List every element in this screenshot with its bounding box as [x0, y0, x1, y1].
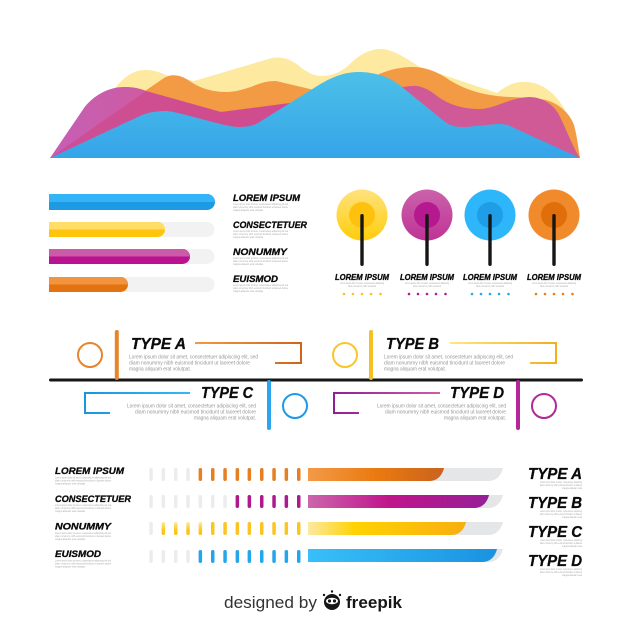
lollipop: magenta: Lorem ipsum dolor sit amet, consectetuer adipiscing	[405, 282, 450, 285]
lollipop: magenta: diam nonummy nibh euismod	[413, 285, 442, 288]
type C item: magna aliquam erat volutpat.	[194, 416, 256, 422]
row 2: consectetuer: magna aliquam erat	[562, 516, 582, 519]
bar: magenta	[49, 249, 215, 264]
area: orange layer	[50, 67, 580, 158]
label: lorem ipsum: LOREM IPSUM	[233, 193, 301, 204]
lollipop: blue: Lorem ipsum dolor sit amet, consectetuer adipiscing	[468, 282, 513, 285]
bar labels	[233, 193, 307, 293]
lollipop: yellow	[335, 190, 389, 295]
row 4: euismod: magna aliquam erat	[562, 574, 582, 577]
lollipop: blue: LOREM IPSUM	[463, 273, 517, 282]
footer credit	[224, 590, 403, 612]
progress bars panel	[49, 194, 215, 292]
lollipop: yellow: Lorem ipsum dolor sit amet, consectetuer adipiscing	[340, 282, 385, 285]
row 2: consectetuer: CONSECTETUER	[55, 494, 131, 505]
row 1: lorem ipsum: magna aliquam erat volutpat	[55, 482, 85, 486]
label: consectetuer: CONSECTETUER	[233, 220, 307, 231]
type A item: TYPE A	[131, 336, 186, 353]
label: nonummy	[233, 247, 289, 266]
area: darker pink wedge	[50, 91, 300, 158]
type A item: diam nonummy nibh euismod tincidunt ut laoreet dolore	[129, 360, 250, 366]
lollipop: orange	[527, 190, 581, 295]
row 2: consectetuer: Lorem ipsum dolor sit amet, consectetuer adipiscing	[540, 510, 583, 513]
timeline panel	[49, 330, 583, 430]
label: consectetuer: magna aliquam erat volutpat	[233, 236, 263, 239]
row 3: nonummy: diam nonummy nibh euismod tincidunt ut laoreet	[540, 542, 582, 545]
label: euismod	[233, 274, 289, 293]
row 1: lorem ipsum: LOREM IPSUM	[55, 466, 125, 477]
lollipop: blue: diam nonummy nibh euismod	[476, 285, 505, 288]
row 4: euismod: diam nonummy nibh euismod tincidunt ut laoreet	[540, 571, 582, 574]
type D item	[334, 380, 556, 430]
timeline axis	[49, 378, 583, 382]
bar: blue	[49, 194, 215, 210]
row 3: nonummy: magna aliquam erat volutpat	[55, 538, 85, 541]
row 4: euismod	[55, 549, 583, 577]
label: nonummy: NONUMMY	[233, 247, 289, 258]
label: euismod: magna aliquam erat volutpat	[233, 290, 263, 293]
row 2: consectetuer: Lorem ipsum dolor sit amet, consectetuer adipiscing elit sed	[55, 504, 112, 507]
type C item	[85, 380, 307, 430]
row 3: nonummy	[55, 522, 583, 548]
type A item	[78, 330, 301, 380]
type C item: Lorem ipsum dolor sit amet, consectetuer adipiscing elit, sed	[127, 404, 256, 410]
row 4: euismod: EUISMOD	[55, 549, 101, 560]
row 1: lorem ipsum: diam nonummy nibh euismod tincidunt ut laoreet	[540, 484, 582, 487]
label: lorem ipsum	[233, 193, 301, 212]
row 3: nonummy: TYPE C	[528, 524, 582, 541]
row 2: consectetuer: TYPE B	[528, 495, 582, 512]
area: blue layer	[50, 72, 580, 158]
label: nonummy: Lorem ipsum dolor sit amet, consectetuer adipiscing elit sed	[233, 257, 289, 260]
row 1: lorem ipsum	[55, 466, 583, 490]
row 2: consectetuer: magna aliquam erat volutpat	[55, 510, 85, 513]
row 4: euismod: TYPE D	[528, 553, 582, 570]
bottom comparison table	[55, 466, 583, 577]
label: lorem ipsum: magna aliquam erat volutpat	[233, 209, 263, 212]
label: consectetuer	[233, 220, 307, 239]
type B item: magna aliquam erat volutpat.	[384, 366, 446, 372]
row 4: euismod: Lorem ipsum dolor sit amet, consectetuer adipiscing elit sed	[55, 560, 112, 562]
type D item: TYPE D	[450, 385, 504, 402]
lollipop: orange: diam nonummy nibh euismod	[540, 285, 569, 288]
row 1: lorem ipsum: Lorem ipsum dolor sit amet, consectetuer adipiscing elit sed	[55, 476, 112, 480]
row 4: euismod: diam nonummy nibh euismod tincidunt ut laoreet dolore	[55, 562, 112, 566]
type B item: diam nonummy nibh euismod tincidunt ut laoreet dolore	[384, 360, 505, 366]
area chart: overlapping mountains	[50, 49, 580, 158]
row 1: lorem ipsum: magna aliquam erat	[562, 487, 582, 490]
type C item: diam nonummy nibh euismod tincidunt ut laoreet dolore	[135, 410, 256, 416]
type A item: magna aliquam erat volutpat.	[129, 366, 191, 372]
label: lorem ipsum: Lorem ipsum dolor sit amet, consectetuer adipiscing elit sed	[233, 203, 289, 206]
row 3: nonummy: Lorem ipsum dolor sit amet, consectetuer adipiscing elit sed	[55, 532, 112, 535]
label: euismod: EUISMOD	[233, 274, 278, 285]
lollipop: yellow: LOREM IPSUM	[335, 273, 389, 282]
bar: yellow	[49, 222, 215, 237]
row 1: lorem ipsum: diam nonummy nibh euismod tincidunt ut laoreet dolore	[55, 480, 112, 482]
freepik wordmark: freepik	[346, 593, 403, 612]
lollipop: orange: LOREM IPSUM	[527, 273, 581, 282]
label: euismod: diam nonummy nibh euismod tincidunt ut laoreet dolore	[233, 287, 289, 290]
row 3: nonummy: diam nonummy nibh euismod tincidunt ut laoreet dolore	[55, 535, 112, 538]
type D item: diam nonummy nibh euismod tincidunt ut laoreet dolore	[385, 410, 506, 416]
type C item: TYPE C	[201, 385, 253, 402]
row 1: lorem ipsum: TYPE A	[528, 466, 582, 483]
lollipop: blue	[463, 190, 517, 295]
lollipop: magenta: LOREM IPSUM	[400, 273, 454, 282]
label: lorem ipsum: diam nonummy nibh euismod tincidunt ut laoreet dolore	[233, 206, 289, 209]
row 3: nonummy: magna aliquam erat	[562, 545, 582, 548]
type D item: Lorem ipsum dolor sit amet, consectetuer adipiscing elit, sed	[377, 404, 506, 410]
row 3: nonummy: Lorem ipsum dolor sit amet, consectetuer adipiscing	[540, 539, 583, 542]
type B item	[333, 330, 556, 380]
type D item: magna aliquam erat volutpat.	[444, 416, 506, 422]
type B item: TYPE B	[386, 336, 439, 353]
label: euismod: Lorem ipsum dolor sit amet, consectetuer adipiscing elit sed	[233, 284, 289, 287]
lollipop: yellow: diam nonummy nibh euismod	[348, 285, 377, 288]
type A item: Lorem ipsum dolor sit amet, consectetuer adipiscing elit, sed	[129, 354, 258, 360]
row 3: nonummy: NONUMMY	[55, 522, 113, 532]
label: consectetuer: diam nonummy nibh euismod tincidunt ut laoreet dolore	[233, 233, 289, 236]
label: nonummy: magna aliquam erat volutpat	[233, 263, 263, 266]
row 2: consectetuer	[55, 494, 583, 519]
label: consectetuer: Lorem ipsum dolor sit amet, consectetuer adipiscing elit sed	[233, 230, 289, 233]
lollipop panel	[335, 190, 581, 295]
lollipop: magenta	[400, 190, 454, 295]
row 2: consectetuer: diam nonummy nibh euismod tincidunt ut laoreet	[540, 513, 582, 516]
area: pink layer	[50, 86, 580, 158]
row 2: consectetuer: diam nonummy nibh euismod tincidunt ut laoreet dolore	[55, 507, 112, 510]
lollipop: orange: Lorem ipsum dolor sit amet, consectetuer adipiscing	[532, 282, 577, 285]
credit text: designed by	[224, 594, 318, 612]
type B item: Lorem ipsum dolor sit amet, consectetuer adipiscing elit, sed	[384, 354, 513, 360]
row 4: euismod: Lorem ipsum dolor sit amet, consectetuer adipiscing	[540, 568, 583, 571]
row 4: euismod: magna aliquam erat volutpat	[55, 566, 85, 568]
bar: orange	[49, 277, 215, 292]
area: yellow layer	[50, 49, 580, 158]
row 1: lorem ipsum: Lorem ipsum dolor sit amet, consectetuer adipiscing	[540, 481, 583, 484]
icon: freepik logo	[323, 590, 341, 610]
label: nonummy: diam nonummy nibh euismod tincidunt ut laoreet dolore	[233, 260, 289, 263]
